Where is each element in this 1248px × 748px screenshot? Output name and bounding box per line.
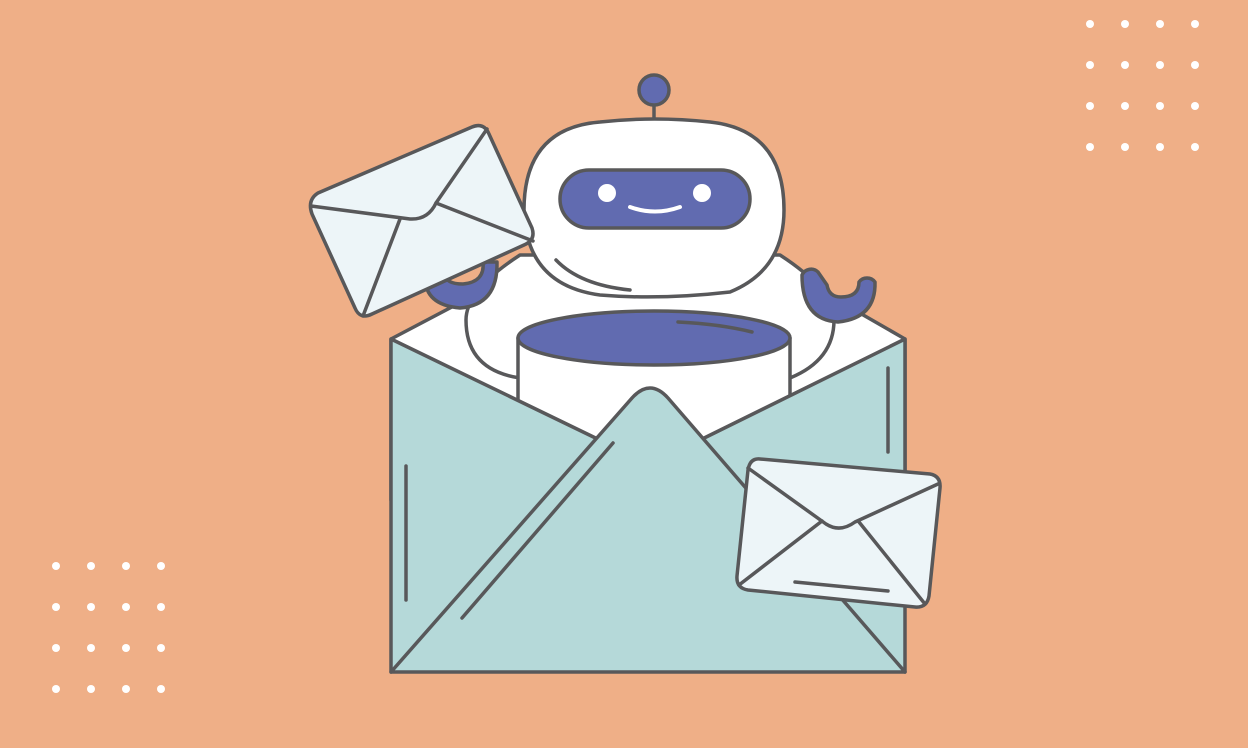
antenna — [652, 104, 656, 122]
head — [524, 119, 784, 297]
small envelope left — [310, 126, 533, 316]
envelope front — [391, 339, 905, 672]
dot grid: top right — [1086, 20, 1199, 151]
dot grid: bottom left — [52, 562, 165, 693]
robot — [425, 75, 875, 450]
left arm — [425, 262, 497, 308]
envelope back (white inside) — [391, 250, 905, 500]
cylinder — [518, 338, 790, 450]
small envelope right — [737, 459, 940, 607]
right arm — [802, 269, 875, 322]
visor — [560, 170, 750, 228]
robot body — [466, 255, 834, 378]
